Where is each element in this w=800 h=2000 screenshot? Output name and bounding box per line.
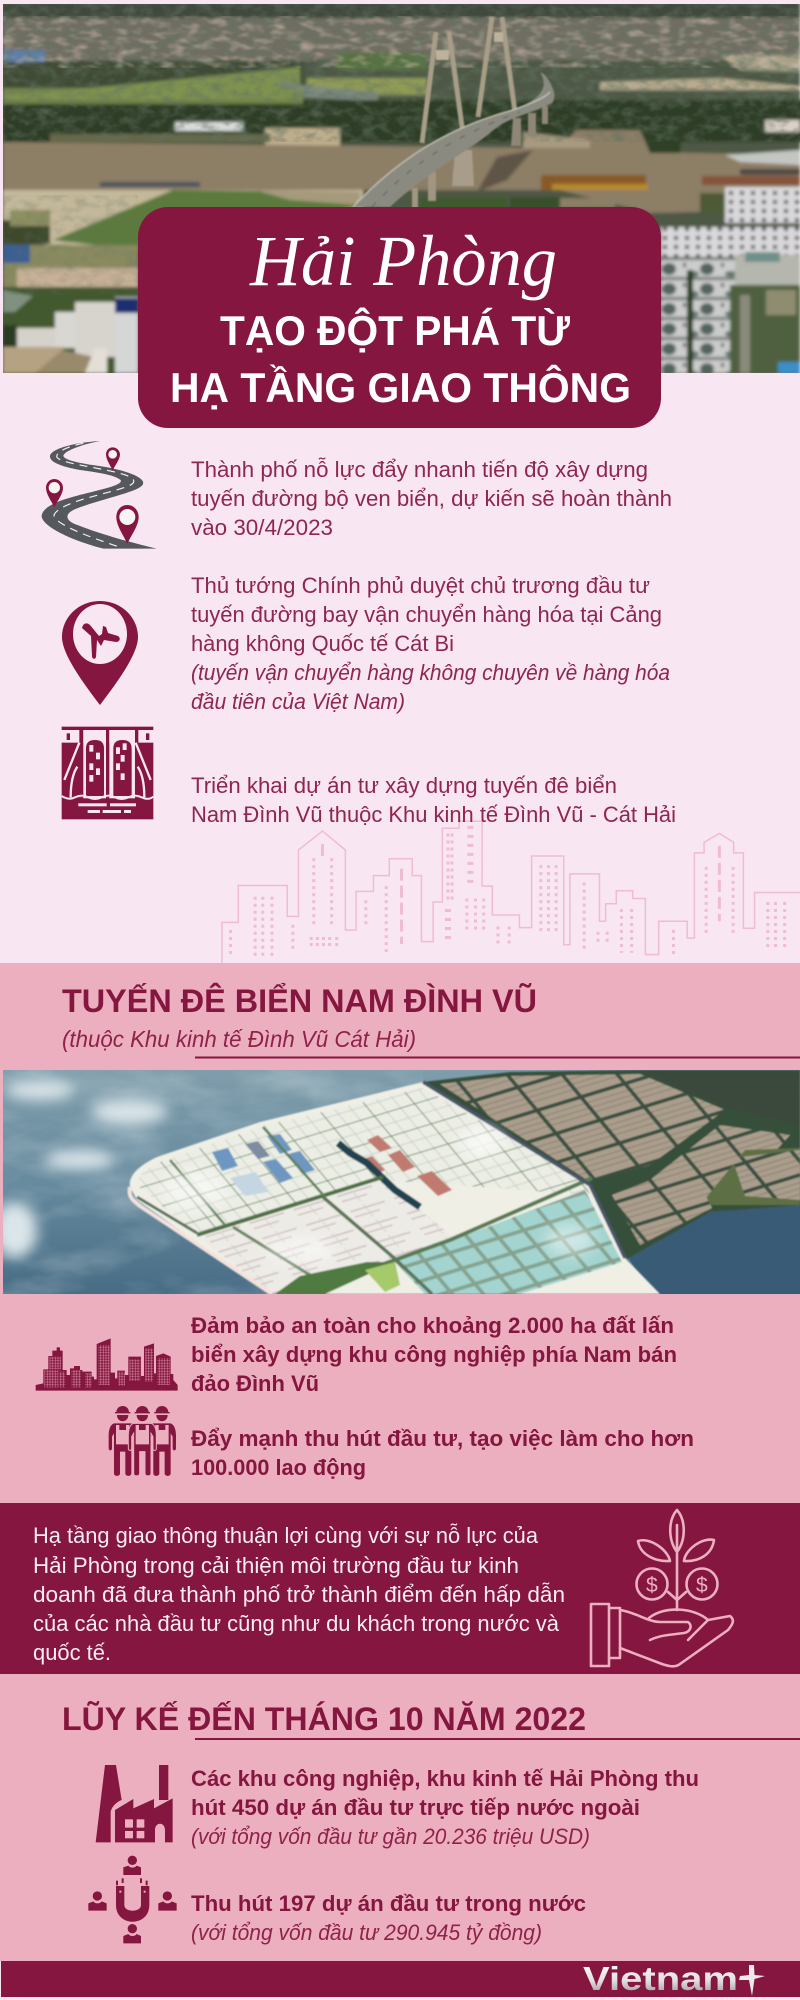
intro text 2: đầu tiên của Việt Nam)	[191, 689, 405, 714]
bullet text: attract investment and jobs: Đẩy mạnh thu hút đầu tư, tạo việc làm cho hơn	[191, 1426, 694, 1451]
intro text 2	[191, 573, 670, 714]
intro text 1: Thành phố nỗ lực đẩy nhanh tiến độ xây dựng	[191, 457, 648, 482]
intro text 2: hàng không Quốc tế Cát Bi	[191, 631, 454, 656]
header photo: Hai Phong cable-stayed bridge and river	[0, 0, 800, 377]
callout text: quốc tế.	[33, 1640, 111, 1665]
blue factory roofs	[212, 1134, 315, 1196]
intro text 2: (tuyến vận chuyển hàng không chuyên về hàng hóa	[191, 660, 670, 685]
bullet text: safety of reclaimed land	[191, 1313, 677, 1396]
aerial image: Nam Dinh Vu industrial zone	[0, 1070, 800, 1294]
heading: sea dyke: TUYẾN ĐÊ BIỂN NAM ĐÌNH VŨ	[62, 983, 537, 1019]
intro item 2: airplane map pin icon	[62, 601, 138, 705]
panel: cumulative results section background	[0, 1674, 800, 1961]
footer bar with Vietnam+ logo	[1, 1960, 800, 1997]
icon: three workers	[109, 1406, 176, 1476]
bullet text: safety of reclaimed land: đảo Đình Vũ	[191, 1371, 319, 1396]
title line 2: HẠ TẦNG GIAO THÔNG	[170, 363, 631, 411]
callout text: của các nhà đầu tư cũng như du khách trong nước và	[33, 1611, 560, 1636]
icon: factory	[96, 1765, 173, 1842]
intro text 2: tuyến đường bay vận chuyển hàng hóa tại Cảng	[191, 602, 662, 627]
title card	[138, 207, 661, 428]
panel: investment destination callout	[0, 1503, 800, 1674]
stat text: 197 domestic projects: Thu hút 197 dự án đầu tư trong nước	[191, 1891, 586, 1916]
panel: sea dyke section background	[0, 963, 800, 1503]
bullet text: attract investment and jobs	[191, 1426, 694, 1480]
icon: city skyline	[36, 1338, 178, 1391]
intro text 1: vào 30/4/2023	[191, 515, 333, 540]
intro text 3: Triển khai dự án tư xây dựng tuyến đê biển	[191, 773, 617, 798]
icon: hand holding money plant: $	[646, 1574, 658, 1597]
icon: magnet attracting people	[88, 1856, 177, 1943]
intro text 1: tuyến đường bộ ven biển, dự kiến sẽ hoàn thành	[191, 486, 672, 511]
bridge	[353, 17, 554, 208]
photo grain	[3, 4, 800, 142]
icon: winding road with pins	[42, 441, 157, 549]
stat text: 450 foreign projects: Các khu công nghiệp, khu kinh tế Hải Phòng thu	[191, 1766, 699, 1791]
bullet text: safety of reclaimed land: biển xây dựng khu công nghiệp phía Nam bán	[191, 1342, 677, 1367]
subheading: sea dyke: (thuộc Khu kinh tế Đình Vũ Cát Hải)	[62, 1026, 416, 1052]
intro text 3	[191, 773, 676, 827]
stat text: 450 foreign projects: hút 450 dự án đầu tư trực tiếp nước ngoài	[191, 1795, 640, 1820]
heading: cumulative to October 2022: LŨY KẾ ĐẾN THÁNG 10 NĂM 2022	[62, 1701, 586, 1737]
intro text 1	[191, 457, 672, 540]
intro text 2: Thủ tướng Chính phủ duyệt chủ trương đầu tư	[191, 573, 650, 598]
stat text: 450 foreign projects	[191, 1766, 699, 1849]
bullet text: safety of reclaimed land: Đảm bảo an toàn cho khoảng 2.000 ha đất lấn	[191, 1313, 674, 1338]
icon: hand holding money plant: $	[696, 1574, 708, 1597]
callout text: Hạ tầng giao thông thuận lợi cùng với sự nỗ lực của	[33, 1523, 539, 1548]
title line 1: TẠO ĐỘT PHÁ TỪ	[220, 306, 570, 354]
stat text: 450 foreign projects: (với tổng vốn đầu tư gần 20.236 triệu USD)	[191, 1824, 590, 1849]
intro text 3: Nam Đình Vũ thuộc Khu kinh tế Đình Vũ - Cát Hải	[191, 802, 676, 827]
icon: hand holding money plant	[591, 1510, 733, 1666]
callout text: Hải Phòng trong cải thiện môi trường đầu tư kinh	[33, 1553, 519, 1578]
stat text: 197 domestic projects	[191, 1891, 586, 1945]
callout text	[33, 1523, 565, 1665]
stat text: 197 domestic projects: (với tổng vốn đầu tư 290.945 tỷ đồng)	[191, 1920, 542, 1945]
logo: Vietnam	[583, 1960, 738, 1997]
intro item 3: sea dyke icon	[62, 727, 153, 819]
title script: Hải Phòng: Hải Phòng	[249, 221, 557, 301]
bullet text: attract investment and jobs: 100.000 lao động	[191, 1455, 366, 1480]
red roofs	[360, 1135, 452, 1196]
callout text: doanh đã đưa thành phố trở thành điểm đến hấp dẫn	[33, 1582, 565, 1607]
skyline line-art background	[222, 821, 800, 963]
